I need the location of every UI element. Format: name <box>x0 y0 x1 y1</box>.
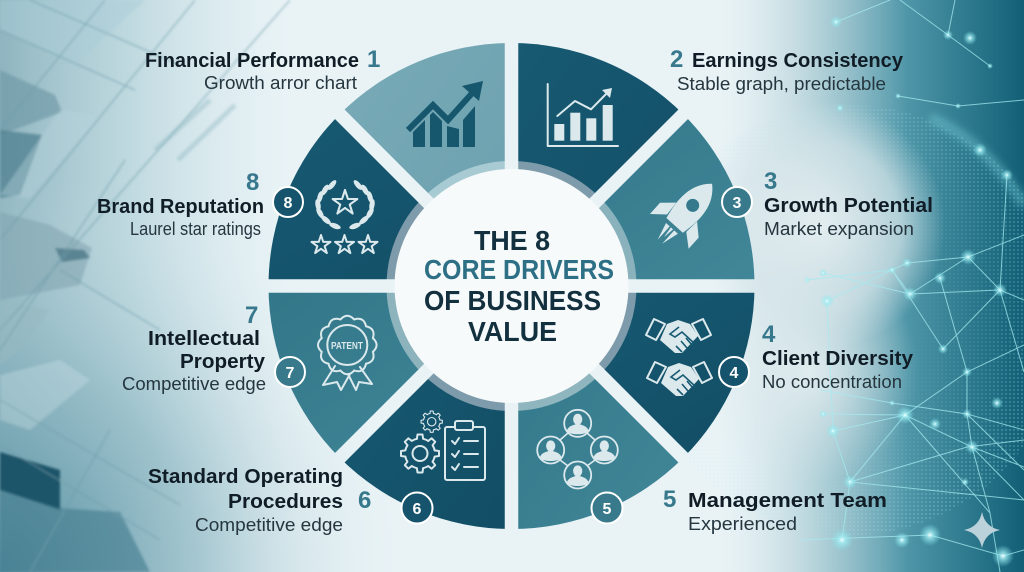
label 4: client diversity: 4 <box>762 321 776 348</box>
badge 3: 3 <box>733 195 742 212</box>
label 8: brand reputation <box>97 169 264 239</box>
icon: growth arrow chart <box>408 81 483 147</box>
label 6: standard operating procedures: Competitive edge <box>195 515 343 535</box>
icon: patent rosette: PATENT <box>331 340 363 352</box>
icon: rocket <box>641 166 731 259</box>
badge 6: 6 <box>413 501 422 518</box>
badge 7 <box>275 357 305 387</box>
label 3: growth potential: Market expansion <box>764 219 914 239</box>
badge 8: 8 <box>284 195 293 212</box>
segment 5: management team <box>518 374 678 529</box>
label 1: financial performance <box>145 46 380 93</box>
title: OF BUSINESS <box>424 285 601 316</box>
label 4: client diversity: Client Diversity <box>762 348 914 370</box>
icon: gears and checklist <box>401 411 485 480</box>
background: glass building facade <box>0 0 290 572</box>
badge 7: 7 <box>286 365 295 382</box>
label 8: brand reputation: Laurel star ratings <box>130 219 261 239</box>
title: CORE DRIVERS <box>424 254 614 285</box>
icon: handshakes <box>646 319 712 396</box>
label 2: earnings consistency: 2 <box>670 46 683 73</box>
label 2: earnings consistency <box>670 46 904 94</box>
badge 6 <box>402 492 432 524</box>
badge 4: 4 <box>730 365 739 382</box>
segment 6: standard operating procedures <box>344 373 505 529</box>
label 7: intellectual property: Property <box>180 351 266 373</box>
icon: sparkle watermark <box>964 512 1000 548</box>
label 6: standard operating procedures: 6 <box>358 487 371 514</box>
label 8: brand reputation: Brand Reputation <box>97 196 264 218</box>
label 1: financial performance: 1 <box>367 46 380 73</box>
label 4: client diversity <box>762 321 914 392</box>
label 6: standard operating procedures: Procedures <box>228 491 343 513</box>
panel: eight-segment wheel <box>268 43 754 529</box>
label 1: financial performance: Financial Performance <box>145 50 359 72</box>
title: VALUE <box>468 316 557 347</box>
label 5: management team <box>663 486 887 534</box>
label 6: standard operating procedures: Standard Operating <box>148 466 343 488</box>
segment 2: earnings consistency <box>518 43 678 199</box>
label 5: management team: Management Team <box>688 490 887 512</box>
icon: team network <box>537 410 618 488</box>
background: network mesh <box>800 0 1024 572</box>
icon: laurel and star ratings <box>311 179 378 253</box>
title <box>424 225 614 347</box>
label 2: earnings consistency: Earnings Consistency <box>692 50 904 72</box>
label 3: growth potential <box>764 168 933 239</box>
title: THE 8 <box>474 225 550 256</box>
label 6: standard operating procedures <box>148 466 371 535</box>
segment 7: intellectual property <box>268 292 424 453</box>
segment 3: growth potential <box>599 119 754 280</box>
icon: stable bar graph <box>548 84 618 146</box>
label 8: brand reputation: 8 <box>246 169 259 196</box>
background: dotted globe <box>635 105 1024 535</box>
badge 8 <box>273 187 303 217</box>
central disc with title <box>394 169 628 403</box>
label 3: growth potential: 3 <box>764 168 777 195</box>
label 7: intellectual property: Intellectual <box>148 328 260 350</box>
segment 4: client diversity <box>598 292 754 453</box>
badge 4 <box>719 357 749 387</box>
label 4: client diversity: No concentration <box>762 372 902 392</box>
label 7: intellectual property: 7 <box>245 302 258 329</box>
segment 1: financial performance <box>344 43 505 198</box>
label 1: financial performance: Growth arror chart <box>204 73 357 93</box>
label 2: earnings consistency: Stable graph, predictable <box>677 74 886 94</box>
badge 5: 5 <box>603 501 612 518</box>
icon: patent rosette <box>318 316 377 390</box>
segment 8: brand reputation <box>268 119 424 280</box>
badge 5 <box>592 492 622 524</box>
label 5: management team: Experienced <box>688 514 797 534</box>
label 7: intellectual property: Competitive edge <box>122 374 266 394</box>
label 5: management team: 5 <box>663 486 676 513</box>
label 7: intellectual property <box>122 302 266 394</box>
badge 3 <box>722 187 752 217</box>
label 3: growth potential: Growth Potential <box>764 195 933 217</box>
